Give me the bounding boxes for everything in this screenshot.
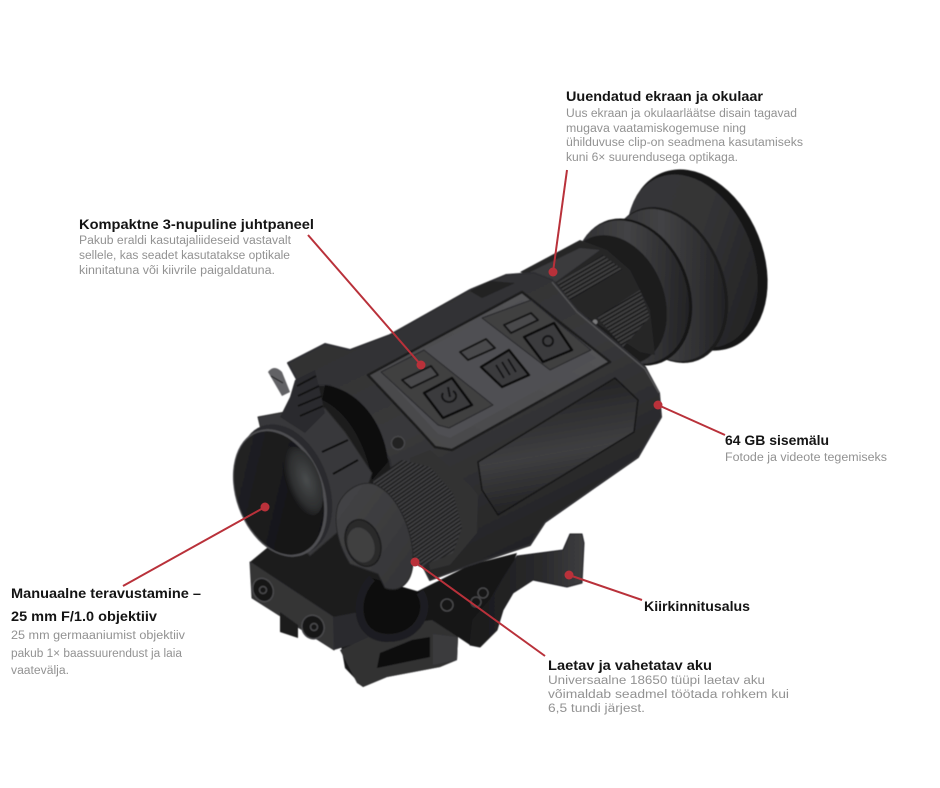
side grip inset	[478, 378, 638, 515]
callout: battery: võimaldab seadmel töötada rohkem kui	[548, 689, 789, 701]
callout: control panel: Pakub eraldi kasutajaliideseid vastavalt	[79, 235, 292, 247]
callout: internal memory: 64 GB sisemälu	[725, 432, 829, 448]
leader line: objective	[123, 502, 270, 586]
leader line: eyepiece	[548, 170, 567, 276]
objective housing	[258, 408, 372, 556]
callout: battery: 6,5 tundi järjest.	[548, 703, 645, 715]
leader line: memory	[654, 400, 725, 435]
dark gap between objective and body	[322, 385, 388, 480]
button: camera	[504, 313, 572, 362]
callout: manual focus objective	[11, 585, 201, 677]
knurled knob	[373, 460, 462, 567]
mount opening	[377, 637, 430, 668]
product illustration: thermal monocular	[216, 148, 793, 687]
quick release mount	[249, 530, 584, 687]
button: power	[402, 366, 472, 418]
callout: screen and eyepiece: Uus ekraan ja okulaarläätse disain tagavad	[566, 108, 797, 120]
callout: screen and eyepiece: Uuendatud ekraan ja okulaar	[566, 88, 764, 104]
callout: screen and eyepiece	[566, 88, 803, 164]
leader line: mount	[564, 570, 642, 600]
button tray left	[381, 350, 493, 428]
callout: internal memory: Fotode ja videote tegemiseks	[725, 452, 887, 464]
callout: manual focus objective: pakub 1× baassuurendust ja laia	[11, 648, 183, 660]
mount screw holes	[249, 575, 328, 643]
callout: manual focus objective: 25 mm germaaniumist objektiiv	[11, 630, 185, 642]
lens cap flip lever	[268, 368, 325, 433]
callout: manual focus objective: Manuaalne teravustamine –	[11, 585, 201, 601]
eyepiece barrel	[520, 240, 655, 355]
leader line: battery	[410, 558, 545, 656]
callout: battery: Laetav ja vahetatav aku	[548, 657, 712, 673]
callout: screen and eyepiece: kuni 6× suurendusega optikaga.	[566, 152, 738, 164]
eyecup	[544, 148, 793, 383]
callout: control panel: Kompaktne 3-nupuline juhtpaneel	[79, 216, 314, 232]
retaining strap	[359, 578, 424, 638]
objective lens	[275, 441, 331, 521]
callout: battery: Universaalne 18650 tüüpi laetav aku	[548, 675, 765, 687]
callout: control panel	[79, 216, 314, 277]
callout: manual focus objective: 25 mm F/1.0 objektiiv	[11, 608, 157, 624]
knob collar	[410, 450, 478, 570]
callout: control panel: kinnitatuna või kiivrile paigaldatuna.	[79, 265, 275, 277]
callout: screen and eyepiece: mugava vaatamiskogemuse ning	[566, 123, 746, 135]
button tray right	[482, 300, 591, 370]
callout: battery	[548, 657, 789, 715]
objective assembly	[216, 368, 404, 570]
callout: screen and eyepiece: ühilduvuse clip-on seadmena kasutamiseks	[566, 137, 803, 149]
button: menu	[460, 339, 529, 387]
control panel	[368, 292, 610, 450]
main housing	[288, 273, 661, 580]
ribbed focus ring	[557, 255, 623, 300]
leader line: control panel	[308, 235, 426, 370]
mount lever	[470, 534, 584, 647]
callout: quick release mount: Kiirkinnitusalus	[644, 598, 750, 614]
cap button	[339, 515, 387, 571]
callout: control panel: sellele, kas seadet kasutatakse optikale	[79, 250, 290, 262]
callout: manual focus objective: vaatevälja.	[11, 665, 69, 677]
callout: internal memory	[725, 432, 887, 464]
cap	[336, 483, 413, 589]
lens hood	[216, 416, 344, 570]
focus knob and battery cap	[336, 450, 478, 638]
